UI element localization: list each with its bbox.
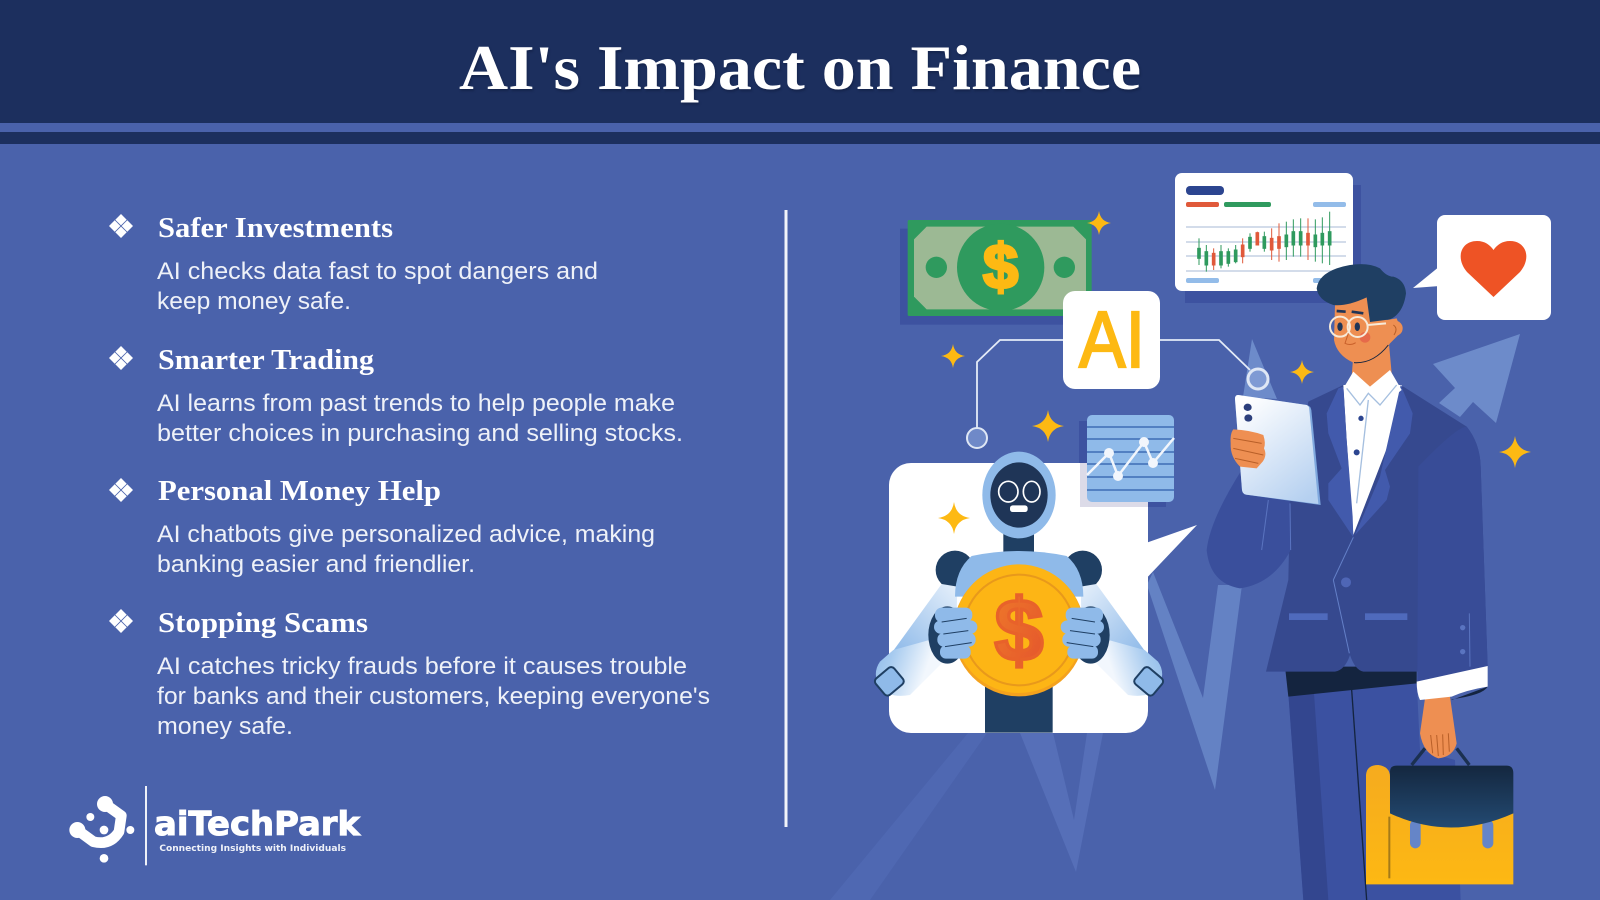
gold coin: $ [994, 581, 1044, 680]
tablet [1231, 395, 1321, 505]
chart card [1175, 173, 1361, 303]
businessman [1207, 264, 1513, 900]
icon: diamond bullet [109, 478, 133, 502]
small line chart card [1079, 415, 1174, 507]
description: AI checks data fast to spot dangers and [157, 258, 598, 285]
robot speech card [889, 463, 1197, 733]
heading: Safer Investments [158, 213, 393, 244]
item: stopping scams [109, 608, 710, 740]
AI box: AI [1079, 295, 1145, 384]
icon: molecule [69, 796, 134, 863]
description [157, 653, 710, 740]
item: personal money help [109, 476, 655, 578]
description [157, 390, 683, 447]
description: better choices in purchasing and selling stocks. [157, 420, 683, 447]
description: for banks and their customers, keeping everyone's [157, 683, 710, 710]
header band [0, 0, 1600, 144]
wordmark: aiTechPark [154, 804, 361, 843]
briefcase [1366, 748, 1513, 884]
description [157, 258, 598, 315]
head [1317, 264, 1406, 407]
description: banking easier and friendlier. [157, 551, 475, 578]
robot body [985, 687, 1053, 733]
tagline: Connecting Insights with Individuals [159, 844, 346, 854]
title: AI's Impact on Finance [459, 32, 1141, 103]
description: keep money safe. [157, 288, 351, 315]
heading: Smarter Trading [158, 345, 374, 376]
jacket [1207, 385, 1488, 682]
robot holding coin [873, 452, 1165, 733]
description: money safe. [157, 713, 293, 740]
description: AI learns from past trends to help people make [157, 390, 675, 417]
item: safer investments [109, 213, 598, 315]
description [157, 521, 655, 578]
description: AI chatbots give personalized advice, making [157, 521, 655, 548]
waist [1285, 667, 1417, 697]
heart speech bubble [1413, 215, 1551, 320]
icon: diamond bullet [109, 346, 133, 370]
shirt details [1354, 400, 1368, 503]
robot hands [928, 606, 1110, 664]
robot arms [873, 584, 1165, 697]
dollar bill [900, 220, 1092, 325]
item: smarter trading [109, 345, 683, 447]
cuff and hand [1417, 666, 1488, 758]
logo: aiTechPark [69, 786, 361, 865]
background zigzag arrows [830, 334, 1520, 900]
vertical divider [784, 210, 788, 827]
illustration [830, 173, 1551, 900]
robot chest [955, 551, 1083, 597]
icon: diamond bullet [109, 214, 133, 238]
sparkles [938, 211, 1531, 534]
icon: diamond bullet [109, 609, 133, 633]
list: four benefits [109, 213, 710, 740]
description: AI catches tricky frauds before it causes trouble [157, 653, 687, 680]
heading: Stopping Scams [158, 608, 368, 639]
heading: Personal Money Help [158, 476, 441, 507]
trousers [1288, 680, 1461, 900]
dollar bill: $ [983, 232, 1018, 302]
gold coin [953, 564, 1085, 696]
connector lines [977, 340, 1250, 428]
robot head [982, 452, 1056, 538]
candlesticks [1198, 212, 1331, 272]
connector nodes [967, 369, 1268, 448]
